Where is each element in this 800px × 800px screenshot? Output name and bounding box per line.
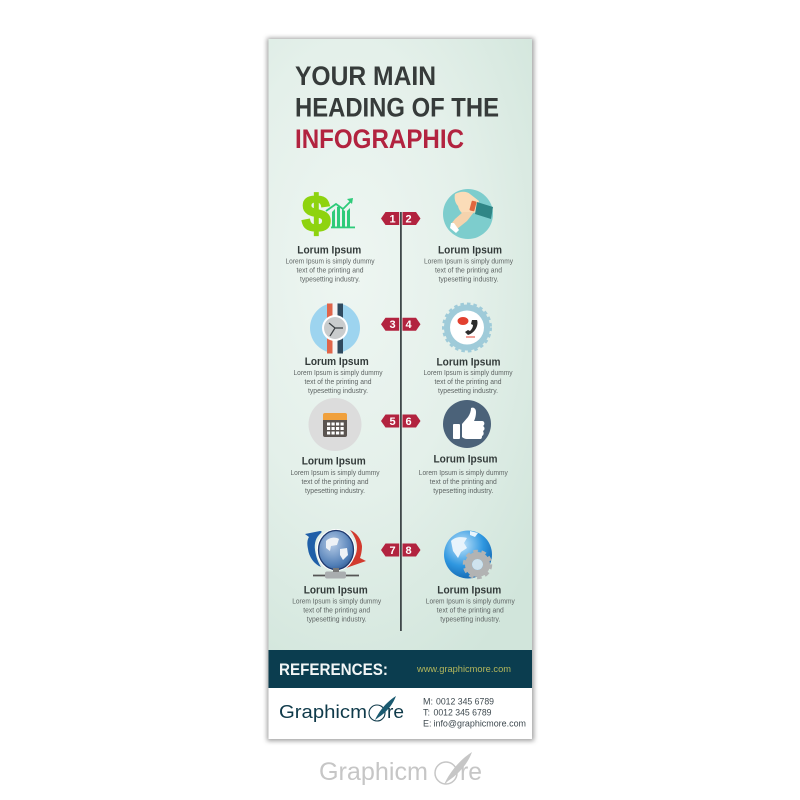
footer	[268, 688, 532, 739]
title: HEADING OF THE	[295, 92, 499, 122]
icon: dollar and growth chart: $	[302, 185, 330, 242]
badges 7 and 8	[381, 544, 420, 557]
title: INFOGRAPHIC	[295, 124, 464, 154]
body text	[294, 370, 383, 395]
badges 1 and 2: 1	[389, 213, 396, 225]
badges 5 and 6: 5	[389, 416, 396, 428]
heading: Lorum Ipsum	[302, 456, 366, 468]
body text: text of the printing and	[304, 379, 372, 386]
badges 7 and 8: 8	[405, 545, 412, 557]
body text: text of the printing and	[303, 608, 370, 614]
body text: Lorem Ipsum is simply dummy	[294, 370, 383, 377]
body text: Lorem Ipsum is simply dummy	[424, 370, 513, 377]
contact details: 0012 345 6789	[434, 708, 492, 718]
body text: text of the printing and	[434, 379, 502, 386]
contact details: T:	[423, 708, 430, 718]
item 3	[294, 303, 383, 395]
body text: typesetting industry.	[438, 276, 499, 284]
body text	[424, 258, 513, 284]
references heading: REFERENCES:	[279, 660, 388, 679]
body text: Lorem Ipsum is simply dummy	[286, 258, 375, 266]
heading: Lorum Ipsum	[297, 244, 361, 256]
title	[295, 61, 499, 154]
body text	[286, 258, 375, 284]
body text: text of the printing and	[302, 479, 369, 486]
contact details	[423, 696, 526, 728]
logo: re	[387, 702, 404, 722]
badges 3 and 4	[381, 318, 420, 331]
item 5	[290, 398, 380, 495]
timeline vertical line	[400, 212, 402, 631]
body text: Lorem Ipsum is simply dummy	[419, 470, 508, 477]
badges 3 and 4: 4	[405, 319, 412, 331]
body text: Lorem Ipsum is simply dummy	[290, 470, 380, 477]
body text: Lorem Ipsum is simply dummy	[292, 598, 382, 606]
badges 5 and 6	[381, 414, 420, 428]
icon: thumbs up	[443, 400, 491, 448]
icon: calendar	[308, 398, 362, 451]
item 1	[286, 185, 375, 284]
body text: typesetting industry.	[300, 276, 360, 284]
item 4	[424, 304, 513, 395]
watermark logo: re	[460, 758, 482, 786]
badges 5 and 6: 6	[405, 416, 412, 428]
icon: globe with gear	[444, 530, 492, 578]
item 8	[426, 530, 515, 624]
heading: Lorum Ipsum	[305, 356, 369, 368]
body text	[424, 370, 513, 395]
logo	[279, 696, 404, 722]
heading: Lorum Ipsum	[438, 244, 502, 256]
item 6	[419, 400, 508, 495]
heading: Lorum Ipsum	[304, 584, 368, 596]
contact details: info@graphicmore.com	[434, 718, 526, 728]
body text	[419, 470, 508, 495]
references band	[268, 650, 532, 688]
body text	[292, 598, 382, 624]
logo: Graphicm	[279, 702, 367, 722]
body text: typesetting industry.	[440, 616, 500, 624]
heading: Lorum Ipsum	[437, 584, 501, 596]
body text: typesetting industry.	[305, 488, 365, 495]
heading: Lorum Ipsum	[436, 356, 501, 368]
body text: text of the printing and	[430, 479, 497, 486]
body text: typesetting industry.	[308, 388, 368, 395]
website url: www.graphicmore.com	[416, 664, 511, 675]
body text: text of the printing and	[296, 268, 364, 274]
icon: 24/7 phone badge	[444, 304, 490, 351]
badges 1 and 2	[381, 212, 420, 225]
watermark logo	[319, 752, 482, 786]
contact details: E:	[423, 718, 432, 728]
body text: text of the printing and	[435, 268, 502, 274]
icon: wrist watch hand	[443, 189, 493, 239]
icon: wrist watch	[310, 303, 360, 354]
body text: typesetting industry.	[433, 488, 493, 495]
title: YOUR MAIN	[295, 61, 436, 91]
body text	[426, 598, 515, 624]
badges 1 and 2: 2	[405, 213, 412, 225]
badges 3 and 4: 3	[389, 319, 396, 331]
heading: Lorum Ipsum	[434, 454, 498, 466]
body text	[290, 470, 380, 495]
body text: text of the printing and	[437, 608, 504, 614]
card shadow	[267, 38, 534, 741]
body text: typesetting industry.	[307, 616, 367, 624]
contact details: 0012 345 6789	[436, 696, 494, 706]
body text: Lorem Ipsum is simply dummy	[426, 598, 515, 606]
contact details: M:	[423, 696, 433, 706]
watermark logo: Graphicm	[319, 758, 428, 786]
icon: globe with arrows on stand	[305, 529, 366, 578]
body text: typesetting industry.	[438, 388, 498, 395]
badges 7 and 8: 7	[389, 545, 396, 557]
item 7	[292, 529, 382, 624]
item 2	[424, 189, 513, 284]
card background	[268, 39, 532, 739]
body text: Lorem Ipsum is simply dummy	[424, 258, 513, 266]
